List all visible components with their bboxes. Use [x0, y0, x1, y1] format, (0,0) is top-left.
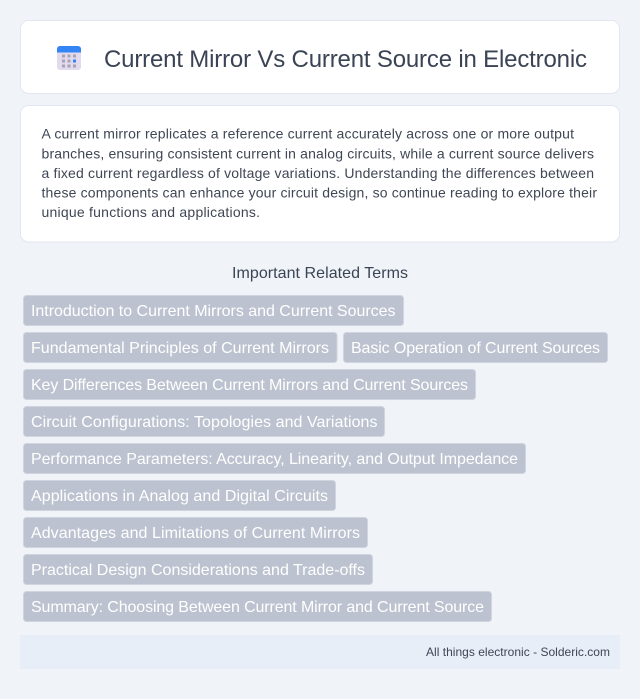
text block: introduction paragraph: unique functions and applications.: [42, 204, 260, 220]
text block: introduction paragraph: a fixed current regardless of voltage variations. Understanding the differences between: [42, 165, 594, 181]
title: Current Mirror Vs Current Source in Electronic: [104, 46, 587, 73]
chip: circuit configurations: [24, 406, 384, 436]
chip: advantages and limitations: [24, 518, 368, 548]
chip: key differences: Key Differences Between Current Mirrors and Current Sources: [31, 377, 468, 394]
panel: header: [20, 20, 620, 94]
chip: applications: Applications in Analog and Digital Circuits: [31, 488, 328, 505]
chip: summary: Summary: Choosing Between Current Mirror and Current Source: [31, 599, 484, 616]
chip: circuit configurations: Circuit Configurations: Topologies and Variations: [31, 414, 378, 431]
chip: key differences: [24, 370, 476, 400]
footer: [20, 635, 620, 669]
chip: applications: [24, 480, 336, 510]
panel: introduction: [20, 106, 620, 242]
chip: basic operation: Basic Operation of Current Sources: [351, 340, 600, 357]
panel: related terms chips: [24, 296, 608, 622]
chip: practical design: [24, 554, 372, 584]
chip: fundamental principles: [24, 332, 337, 362]
icon: calendar grid: [57, 46, 81, 70]
footer credit: All things electronic - Solderic.com: [426, 645, 610, 659]
chip: practical design: Practical Design Considerations and Trade-offs: [31, 562, 365, 579]
text block: introduction paragraph: these components can enhance your circuit design, so continue reading to explore their: [42, 184, 597, 200]
chip: introduction: [24, 296, 404, 326]
chip: advantages and limitations: Advantages and Limitations of Current Mirrors: [31, 525, 360, 542]
heading: important related terms: Important Related Terms: [232, 265, 408, 282]
text block: introduction paragraph: branches, ensuring consistent current in analog circuits, while a current source delivers: [42, 145, 594, 161]
chip: performance parameters: Performance Parameters: Accuracy, Linearity, and Output Impedance: [31, 451, 518, 468]
chip: introduction: Introduction to Current Mirrors and Current Sources: [31, 303, 396, 320]
chip: summary: [24, 592, 492, 622]
text block: introduction paragraph: A current mirror replicates a reference current accurately across one or more output: [42, 126, 574, 142]
text block: introduction paragraph: [42, 126, 597, 220]
chip: performance parameters: [24, 444, 526, 474]
chip: basic operation: [344, 332, 608, 362]
chip: fundamental principles: Fundamental Principles of Current Mirrors: [31, 340, 329, 357]
